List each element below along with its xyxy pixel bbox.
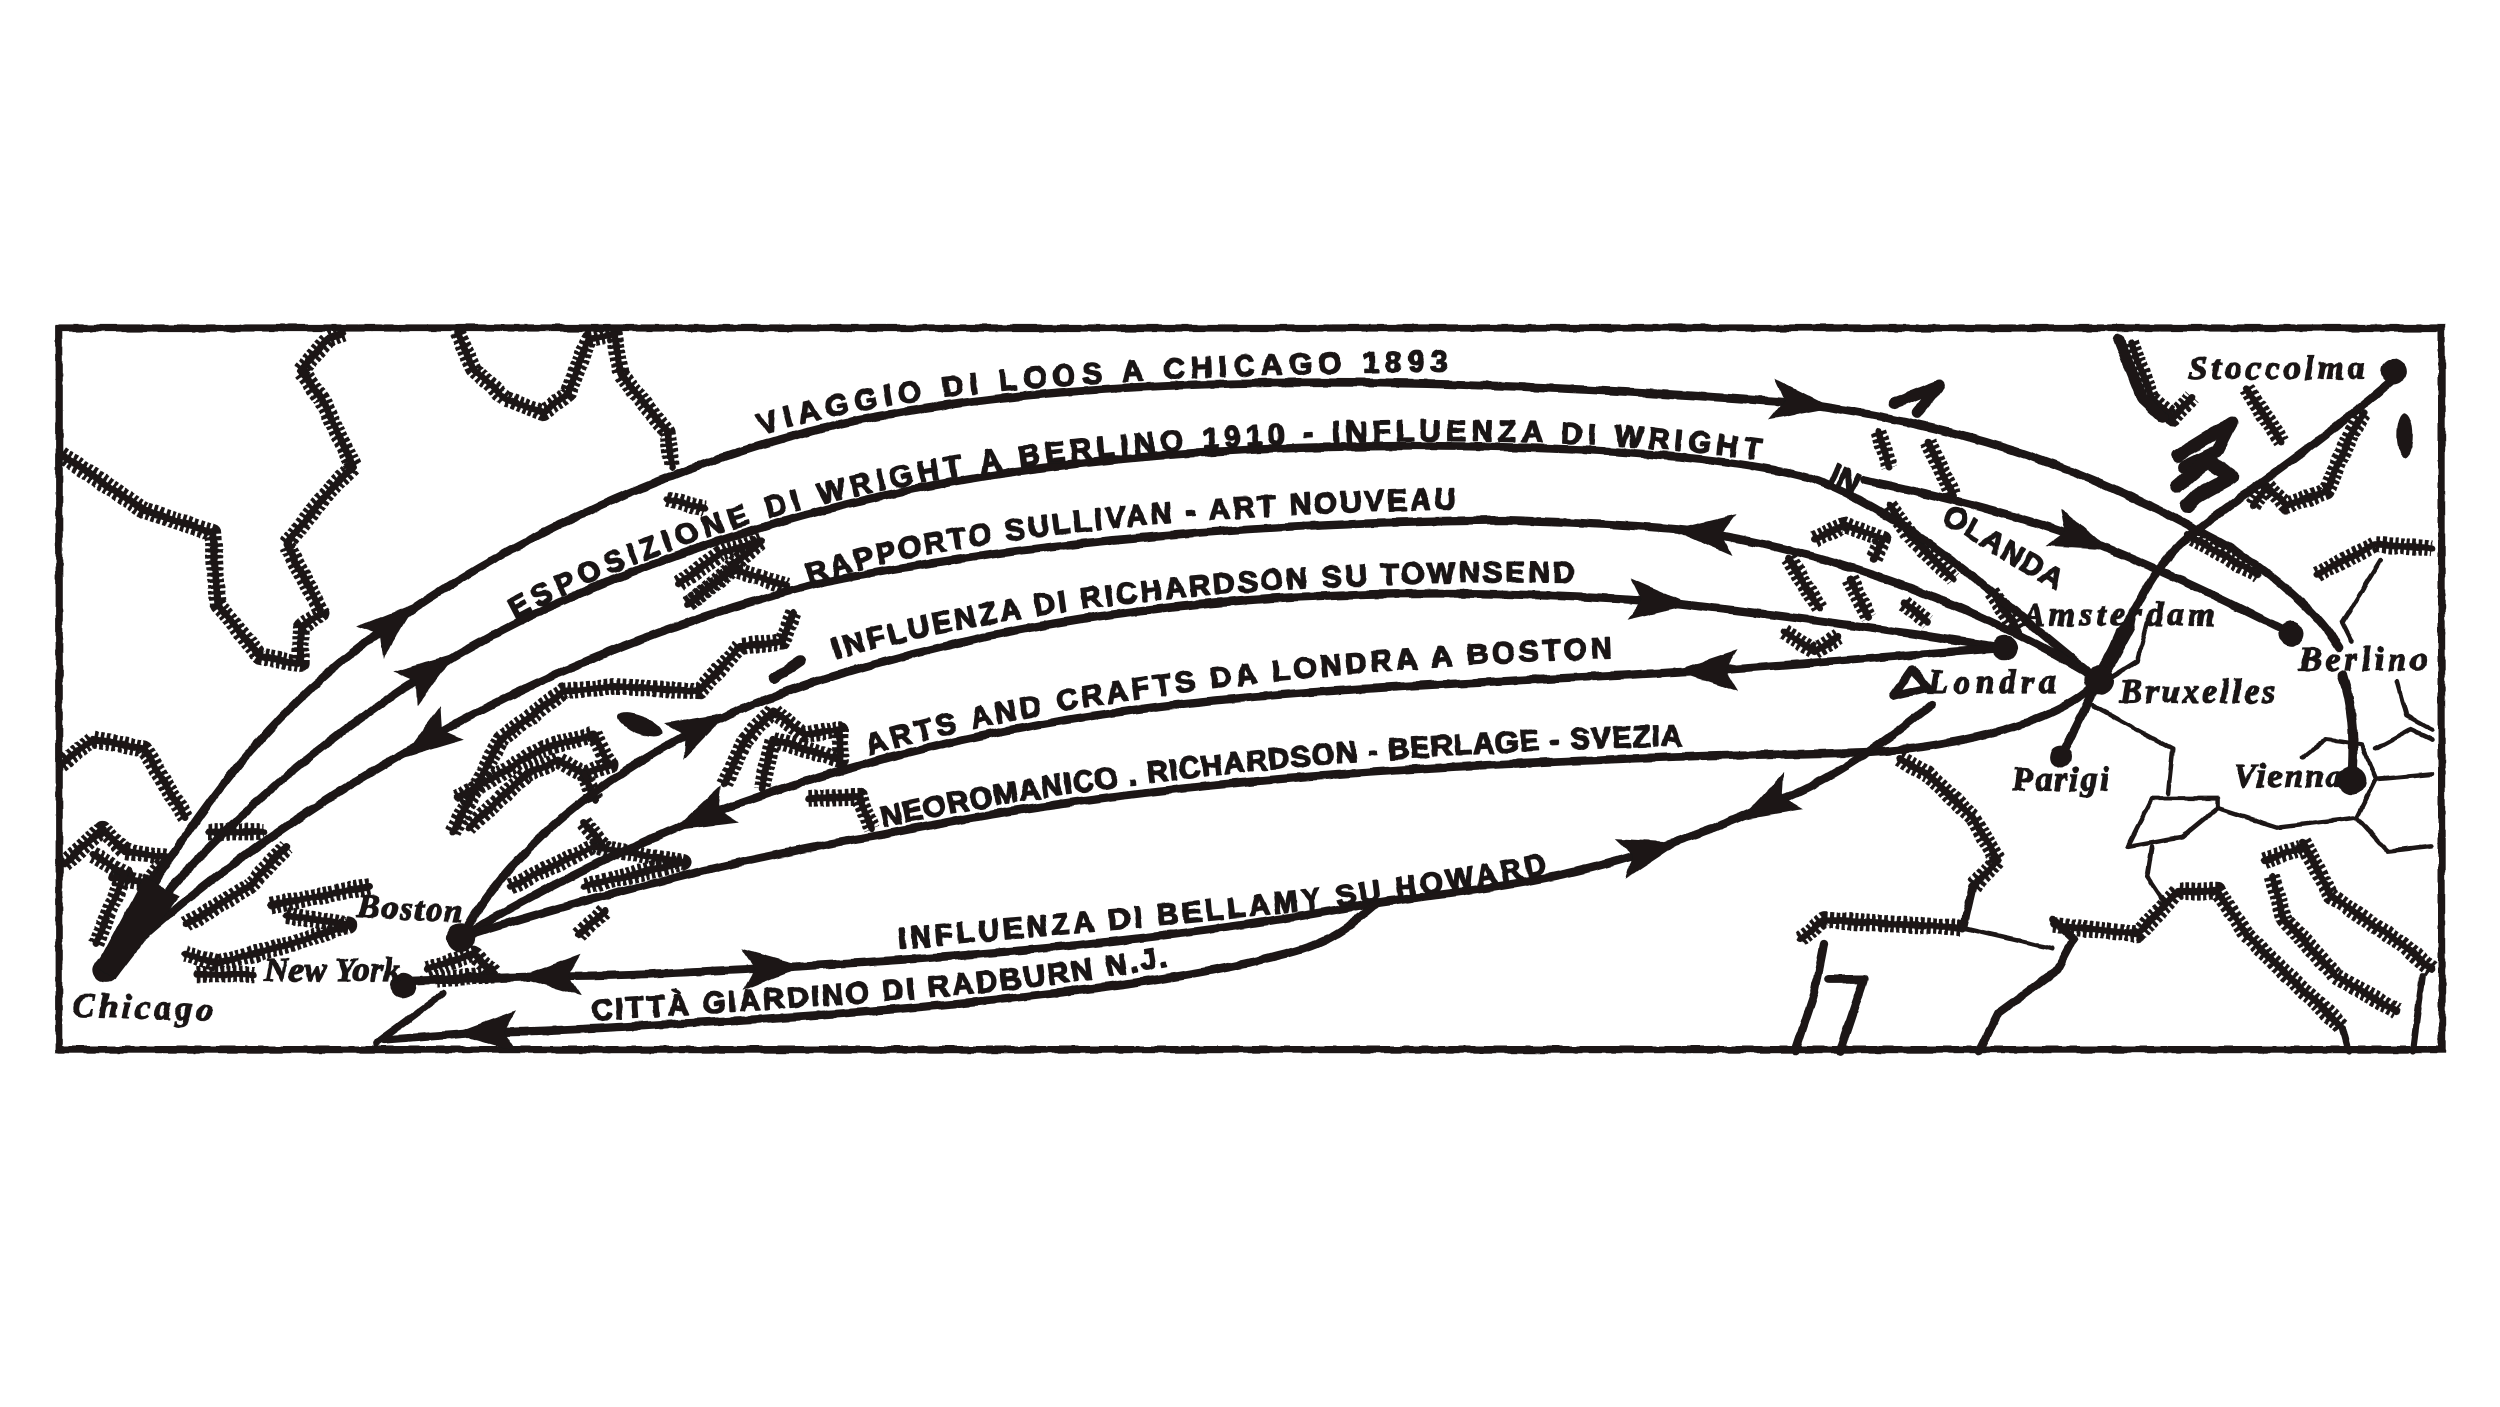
label: Neoromanico: NEOROMANICO . RICHARDSON - BERLAGE - SVEZIA — [879, 724, 1683, 828]
city labels — [72, 350, 2427, 1029]
arrow: Rapporto Sullivan — [107, 509, 2099, 970]
city: Parigi: Parigi — [2012, 761, 2109, 798]
label: Rapporto Sullivan: RAPPORTO SULLIVAN - ART NOUVEAU — [804, 488, 1456, 582]
city: Londra: Londra — [1927, 664, 2056, 701]
route labels — [506, 350, 2069, 1022]
coastlines: Europe — [1784, 339, 2432, 1051]
arrow: Radburn — [384, 904, 1376, 1054]
national borders — [1963, 560, 2432, 949]
city: Amsterdam: Amsterdam — [2020, 597, 2214, 634]
route: Stoccolma — [2099, 381, 2392, 680]
city: Berlino: Berlino — [2298, 641, 2427, 678]
coastlines: North America — [61, 333, 872, 1043]
label: Arts and Crafts: ARTS AND CRAFTS DA LONDRA A BOSTON — [868, 636, 1611, 756]
label: Bellamy su Howard: INFLUENZA DI BELLAMY SU HOWARD — [898, 854, 1546, 950]
label: In: IN — [1824, 458, 1865, 501]
route: Amsterdam thick stem — [2099, 627, 2128, 680]
label: Radburn: CITTÀ GIARDINO DI RADBURN N.J. — [591, 948, 1168, 1022]
arrow: Esposizione di Wright — [107, 446, 2099, 970]
arrow: Neoromanico — [461, 680, 2099, 938]
label: Olanda: OLANDA — [1937, 499, 2069, 597]
arrow: Influenza di Richardson — [461, 578, 2005, 938]
arrow: Arts and Crafts — [461, 648, 2005, 938]
label: Viaggio di Loos: VIAGGIO DI LOOS A CHICAGO 1893 — [754, 350, 1448, 434]
city: Stoccolma: Stoccolma — [2189, 350, 2365, 387]
frame — [59, 328, 2442, 1050]
arrow: Viaggio di Loos — [107, 379, 2339, 970]
map frame and artwork — [54, 323, 2447, 1056]
city: New York: New York — [263, 952, 400, 989]
arrow: Bellamy su Howard — [413, 704, 1933, 998]
city: Boston: Boston — [355, 888, 464, 930]
route: Parigi — [2061, 680, 2099, 757]
city: Chicago: Chicago — [72, 987, 214, 1029]
city: Vienna: Vienna — [2234, 758, 2342, 795]
label: Esposizione di Wright: ESPOSIZIONE DI WRIGHT A BERLINO 1910 - INFLUENZA DI WRIGHT — [506, 418, 1764, 618]
arrow: In Olanda — [1864, 480, 2291, 634]
city: Bruxelles: Bruxelles — [2119, 673, 2275, 710]
city markers — [93, 358, 2406, 998]
label: Influenza di Richardson: INFLUENZA DI RICHARDSON SU TOWNSEND — [830, 560, 1574, 660]
route: Vienna — [2342, 675, 2353, 781]
